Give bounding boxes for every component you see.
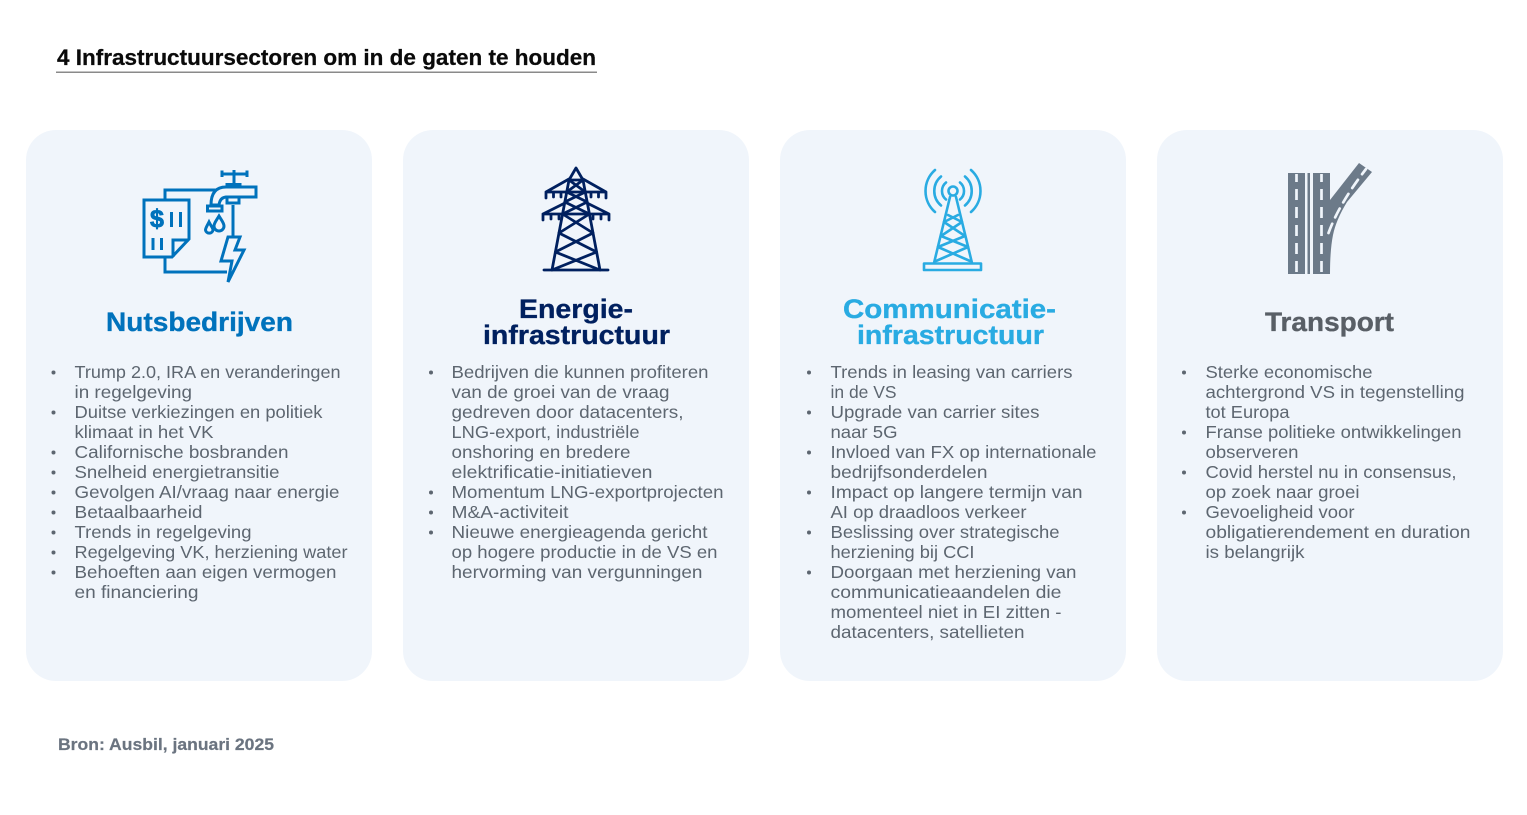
list: Nutsbedrijven [52,362,348,602]
list: Nutsbedrijven: Trends in regelgeving [74,522,251,542]
list: Transport: Gevoeligheid voor [1206,502,1355,522]
list: Communicatie-infrastructuur: herziening bij CCI [830,542,974,562]
heading: Energie-infrastructuur: infrastructuur [483,320,671,350]
list: Nutsbedrijven: Betaalbaarheid [74,502,202,522]
list: Energie-infrastructuur: Nieuwe energieagenda gericht [452,522,708,542]
list: Energie-infrastructuur: LNG-export, industriële [452,422,640,442]
list: Energie-infrastructuur: onshoring en bredere [452,442,630,462]
list: Transport: obligatierendement en duration [1206,522,1470,542]
list: Energie-infrastructuur: op hogere productie in de VS en [452,542,718,562]
list: Communicatie-infrastructuur: communicatieaandelen die [830,582,1062,602]
icon: antenna mast [924,170,981,270]
list: Energie-infrastructuur: hervorming van vergunningen [452,562,702,582]
list: Nutsbedrijven: Duitse verkiezingen en politiek [74,402,323,422]
icon: bill, tap and lightning bolt: $ [150,205,164,233]
icon: transmission tower [543,168,609,270]
list: Communicatie-infrastructuur: in de VS [830,382,896,402]
list: Transport: Covid herstel nu in consensus, [1206,462,1456,482]
panel: Nutsbedrijven [26,130,372,681]
heading: Energie-infrastructuur [483,294,671,350]
heading: Nutsbedrijven: Nutsbedrijven [106,307,293,337]
list: Energie-infrastructuur: Bedrijven die kunnen profiteren [452,362,708,382]
icon: road with exit lane [1288,163,1372,274]
list: Communicatie-infrastructuur: naar 5G [830,422,898,442]
list: Transport: observeren [1206,442,1298,462]
heading: Transport: Transport [1265,307,1394,337]
list: Nutsbedrijven: Behoeften aan eigen vermogen [74,562,336,582]
list: Energie-infrastructuur: Momentum LNG-exportprojecten [452,482,724,502]
list: Transport: achtergrond VS in tegenstelling [1206,382,1464,402]
list: Energie-infrastructuur: elektrificatie-initiatieven [452,462,652,482]
heading: Communicatie-infrastructuur: Communicatie- [843,294,1056,324]
list: Communicatie-infrastructuur: Impact op langere termijn van [830,482,1082,502]
title: 4 Infrastructuursectoren om in de gaten te houden [57,45,596,70]
list: Nutsbedrijven: Snelheid energietransitie [74,462,280,482]
list: Nutsbedrijven: Trump 2.0, IRA en veranderingen [74,362,340,382]
list: Transport: tot Europa [1206,402,1290,422]
list: Nutsbedrijven: in regelgeving [74,382,192,402]
list: Communicatie-infrastructuur: Upgrade van carrier sites [830,402,1040,422]
heading: Communicatie-infrastructuur [843,294,1056,350]
icon: bill, tap and lightning bolt [144,170,256,282]
list: Transport: op zoek naar groei [1206,482,1360,502]
list: Transport: Franse politieke ontwikkelingen [1206,422,1462,442]
list: Nutsbedrijven: klimaat in het VK [74,422,214,442]
list: Communicatie-infrastructuur: Invloed van FX op internationale [830,442,1096,462]
list: Transport [1182,362,1470,562]
list: Energie-infrastructuur: van de groei van de vraag [452,382,670,402]
list: Nutsbedrijven: en financiering [74,582,198,602]
list: Communicatie-infrastructuur: bedrijfsonderdelen [830,462,988,482]
list: Communicatie-infrastructuur: Trends in leasing van carriers [830,362,1073,382]
list: Energie-infrastructuur: M&A-activiteit [452,502,569,522]
heading: Energie-infrastructuur: Energie- [519,294,633,324]
list: Transport: is belangrijk [1206,542,1305,562]
list: Nutsbedrijven: Gevolgen AI/vraag naar energie [74,482,340,502]
list: Communicatie-infrastructuur [807,362,1096,642]
list: Energie-infrastructuur: gedreven door datacenters, [452,402,684,422]
panel: Energie-infrastructuur [403,130,749,681]
list: Communicatie-infrastructuur: AI op draadloos verkeer [830,502,1027,522]
list: Nutsbedrijven: Californische bosbranden [74,442,288,462]
source note: Bron: Ausbil, januari 2025 [58,736,274,754]
list: Nutsbedrijven: Regelgeving VK, herziening water [74,542,348,562]
list: Communicatie-infrastructuur: Beslissing over strategische [830,522,1060,542]
list: Communicatie-infrastructuur: momenteel niet in EI zitten - [830,602,1062,622]
heading: Communicatie-infrastructuur: infrastructuur [857,320,1045,350]
panel: Communicatie-infrastructuur [780,130,1126,681]
list: Communicatie-infrastructuur: Doorgaan met herziening van [830,562,1076,582]
list: Energie-infrastructuur [429,362,724,582]
panel: Transport [1157,130,1503,681]
list: Communicatie-infrastructuur: datacenters, satellieten [830,622,1024,642]
list: Transport: Sterke economische [1206,362,1372,382]
